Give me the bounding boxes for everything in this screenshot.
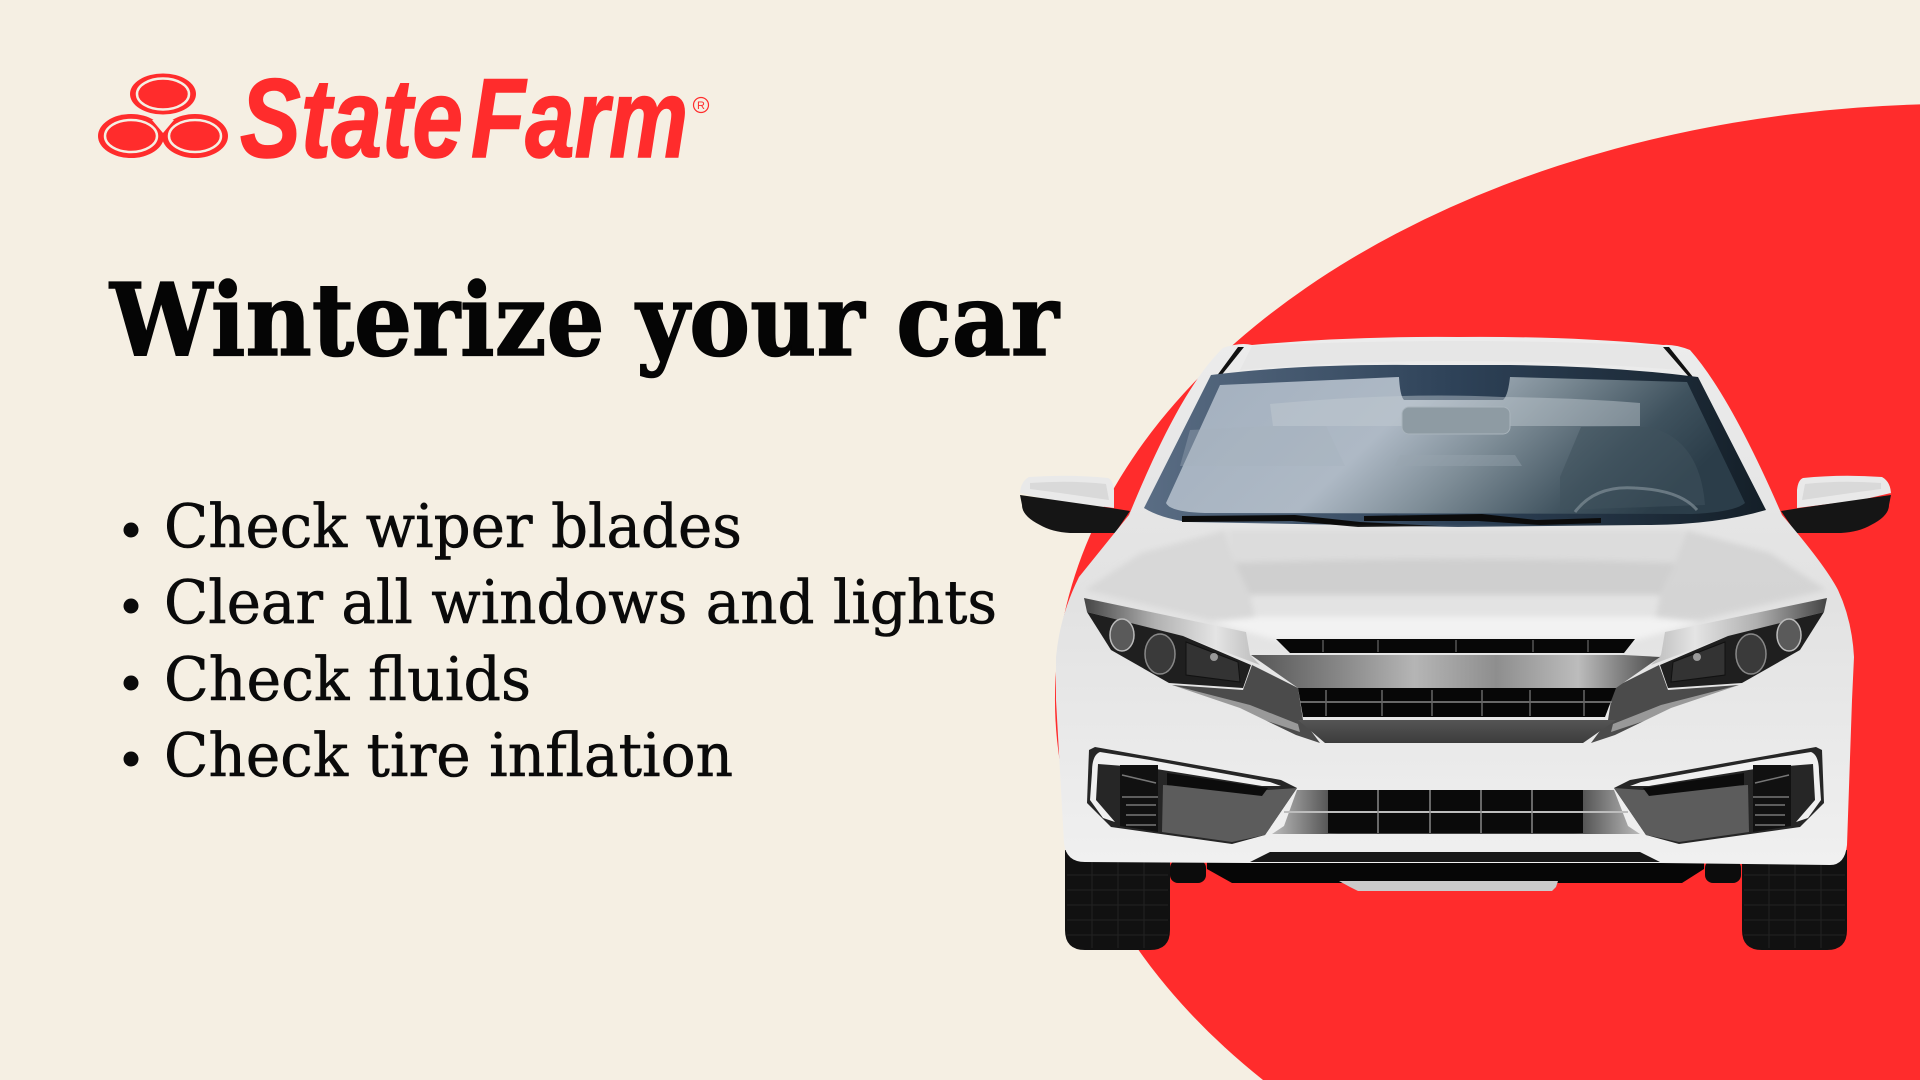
trim arm bbox=[1172, 665, 1320, 743]
side mirrors bbox=[1020, 476, 1891, 533]
headlight bbox=[1087, 612, 1251, 688]
wordmark bbox=[240, 56, 708, 181]
rear view mirror bbox=[1402, 407, 1510, 434]
State Farm logo bbox=[98, 56, 708, 181]
bullet: windows and lights: Clear all windows and lights bbox=[164, 568, 997, 638]
chin trim bbox=[1298, 720, 1616, 743]
fog lamp plate bbox=[1162, 785, 1297, 842]
roof panel bbox=[1240, 341, 1680, 370]
windshield bbox=[1144, 365, 1766, 527]
lower lip bbox=[1250, 852, 1660, 862]
chrome center bar bbox=[1251, 655, 1660, 688]
wordmark: Farm bbox=[471, 56, 688, 181]
wordmark: R bbox=[697, 100, 705, 112]
bumper intake bbox=[1272, 790, 1640, 834]
windshield frame bbox=[1144, 365, 1766, 527]
illustration: white car front view bbox=[1020, 337, 1891, 950]
rear window reflection bbox=[1270, 396, 1640, 426]
heading: Winterize your car bbox=[109, 261, 1060, 379]
headlights and fog lamps bbox=[1084, 598, 1827, 844]
skid plate bbox=[1339, 881, 1558, 891]
fog lamp housing bbox=[1087, 747, 1297, 844]
bullet: wiper blades: Check wiper blades bbox=[164, 492, 742, 562]
front tires bbox=[1065, 850, 1847, 950]
bullet: tire inflation: Check tire inflation bbox=[164, 721, 733, 791]
fog lamp chrome strip bbox=[1090, 752, 1281, 822]
windshield glass bbox=[1166, 377, 1745, 514]
tire tread lines bbox=[1067, 862, 1845, 948]
upper grille bbox=[1276, 639, 1635, 653]
underbody bbox=[1207, 850, 1704, 883]
wipers bbox=[1182, 514, 1601, 527]
lower center grille bbox=[1298, 688, 1616, 717]
wordmark: State bbox=[240, 56, 463, 181]
red ellipse backdrop bbox=[1055, 104, 1920, 1080]
bullet list bbox=[124, 492, 997, 791]
eyebrow trim bbox=[1084, 598, 1260, 665]
roof pillars bbox=[1216, 347, 1693, 377]
bullet: fluids: Check fluids bbox=[164, 645, 531, 715]
steering wheel bbox=[1575, 488, 1697, 512]
icon: three interlocking ovals bbox=[98, 74, 228, 158]
car body bbox=[1056, 337, 1854, 865]
seats bbox=[1560, 427, 1705, 510]
hood shading bbox=[1085, 530, 1826, 640]
fog lamp mesh bbox=[1120, 765, 1158, 832]
